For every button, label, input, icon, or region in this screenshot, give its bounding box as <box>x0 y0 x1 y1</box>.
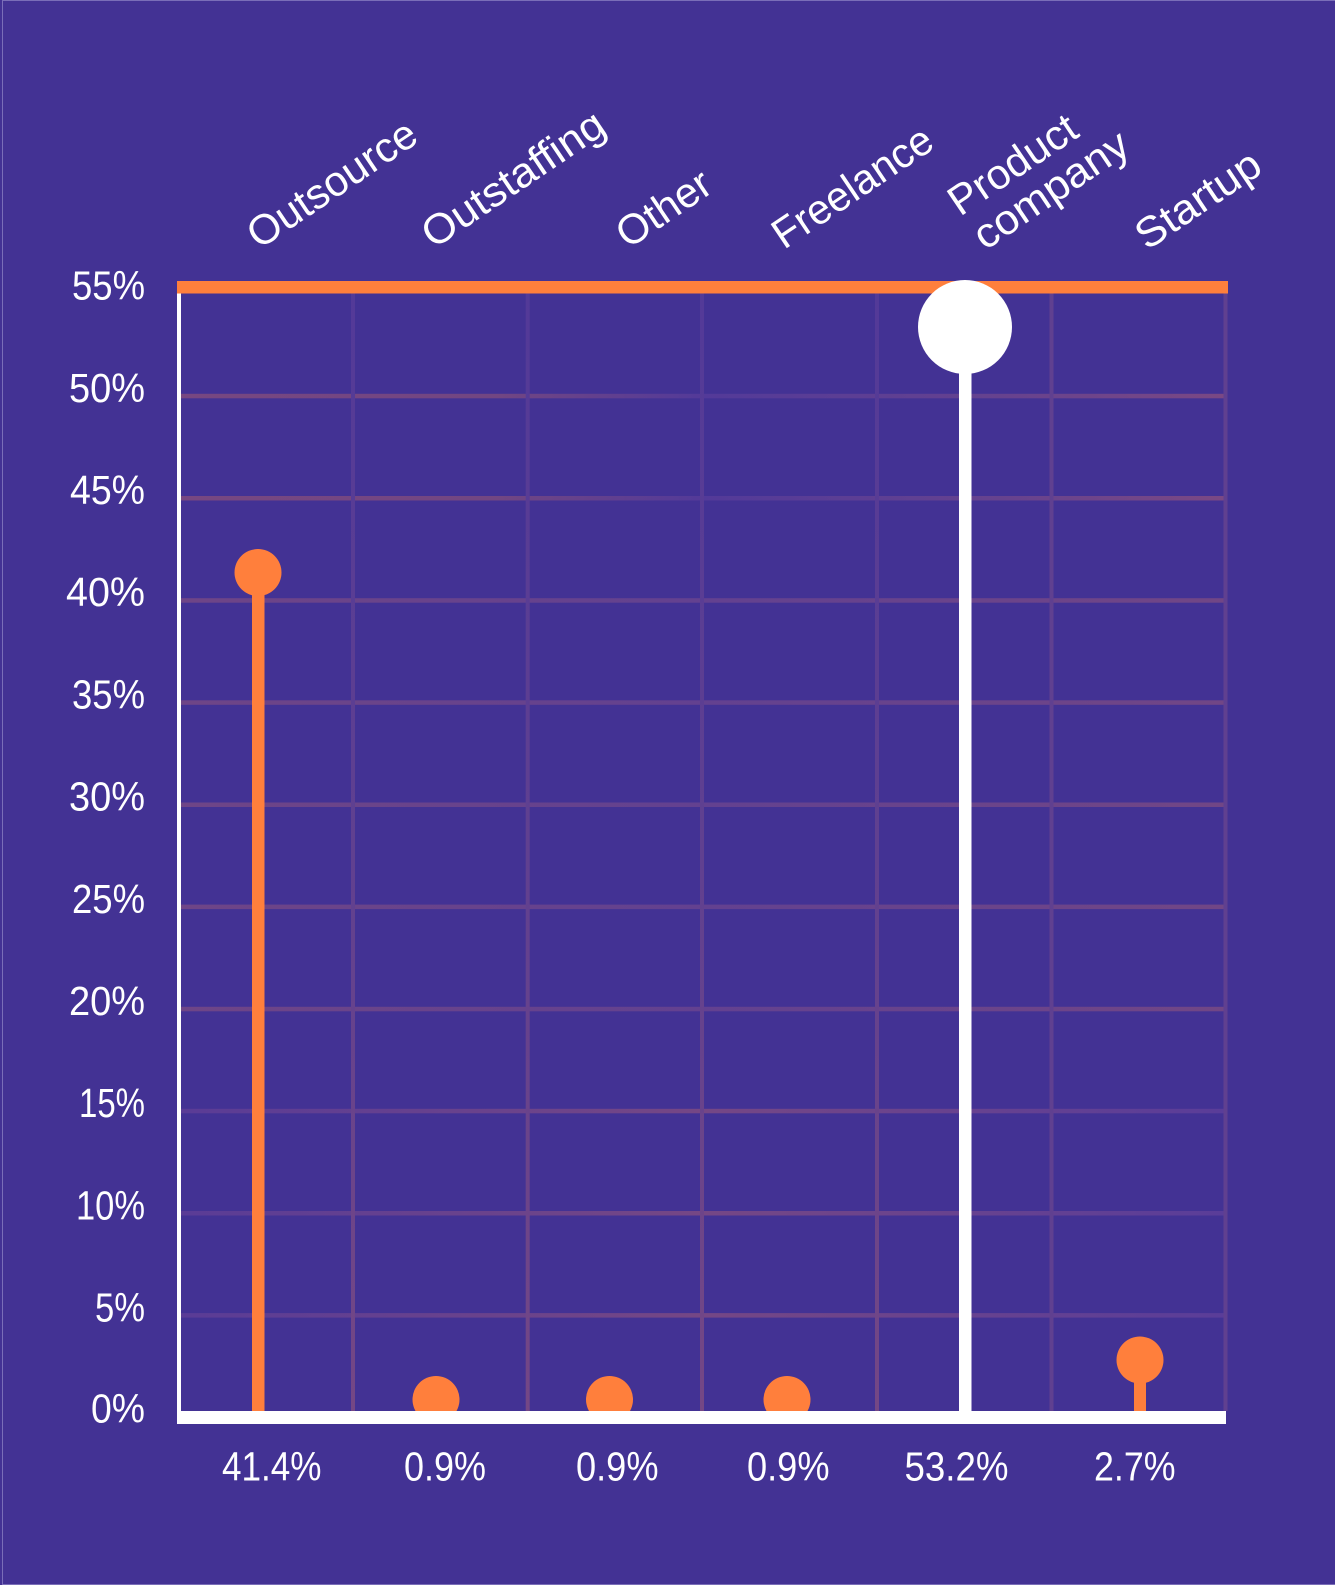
lollipop: Product company 53.2% <box>918 280 1012 1412</box>
y axis labels <box>66 263 145 1432</box>
y axis labels: 15% <box>79 1080 145 1126</box>
value labels: 41.4% <box>222 1444 322 1490</box>
category labels: Other <box>607 159 720 257</box>
lollipop: Outsource 41.4% <box>234 549 282 1412</box>
y axis labels: 35% <box>72 671 145 717</box>
lollipop: Freelance 0.9% <box>764 1376 810 1423</box>
y axis labels: 25% <box>72 876 145 922</box>
category labels: Product <box>939 104 1086 224</box>
x axis line <box>177 1411 1226 1424</box>
value labels: 2.7% <box>1094 1444 1176 1490</box>
lollipop: Startup 2.7% <box>1116 1336 1164 1412</box>
y axis labels: 10% <box>76 1182 145 1228</box>
value labels: 0.9% <box>404 1444 486 1490</box>
value labels: 0.9% <box>747 1444 830 1490</box>
category labels: Outstaffing <box>412 100 613 257</box>
category labels: Outsource <box>238 109 426 257</box>
category labels: Startup <box>1126 140 1270 258</box>
y axis labels: 50% <box>69 365 145 411</box>
value labels: 53.2% <box>904 1444 1008 1490</box>
y axis labels: 45% <box>70 467 145 513</box>
value labels <box>222 1444 1176 1490</box>
category labels <box>238 100 1270 258</box>
y axis labels: 20% <box>69 978 145 1024</box>
top 55% orange line <box>177 281 1228 294</box>
value labels: 0.9% <box>576 1444 658 1490</box>
y axis labels: 55% <box>72 263 145 309</box>
chart grid <box>181 293 1228 1411</box>
y axis labels: 0% <box>91 1386 145 1432</box>
y axis labels: 40% <box>66 569 145 615</box>
y axis labels: 30% <box>69 774 145 820</box>
category labels: company <box>964 120 1138 258</box>
y axis line <box>177 281 181 1424</box>
lollipop: Other 0.9% <box>586 1376 633 1423</box>
lollipop: Outstaffing 0.9% <box>412 1376 460 1423</box>
y axis labels: 5% <box>95 1285 145 1331</box>
category labels: Freelance <box>763 116 942 257</box>
